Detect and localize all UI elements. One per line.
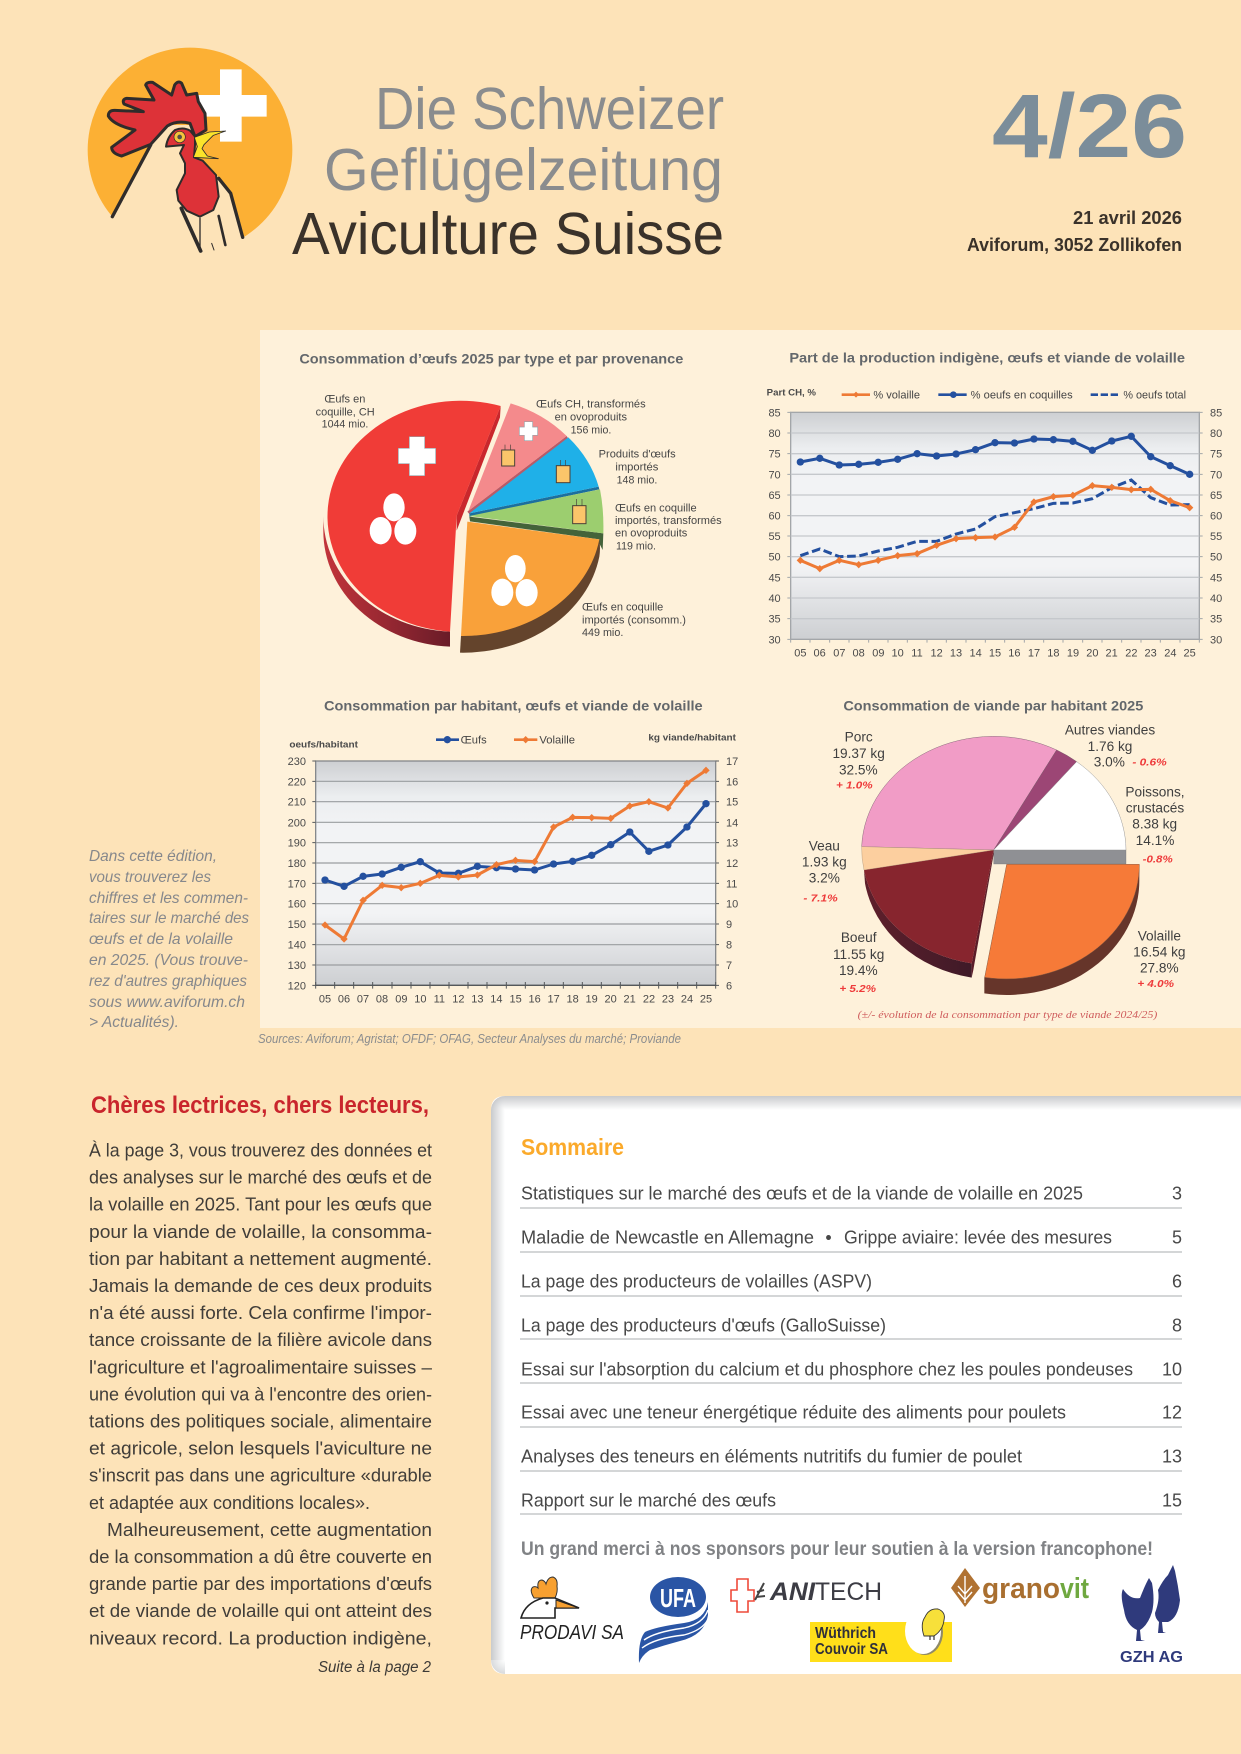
contents list: 5	[1172, 1228, 1182, 1248]
series: eggs	[325, 804, 706, 886]
contents list: Grippe aviaire: levée des mesures	[844, 1228, 1112, 1248]
contents list: Essai sur l'absorption du calcium et du phosphore chez les poules pondeuses	[521, 1360, 1133, 1380]
legend: kg viande/habitant	[648, 733, 736, 743]
slice: Swiss shell eggs	[323, 401, 501, 647]
right axis: 40	[1210, 593, 1222, 605]
label: Swiss shell eggs: Œufs en	[324, 393, 365, 405]
x axis: 10	[892, 648, 904, 660]
right axis: 15	[726, 797, 738, 809]
x axis: 22	[1125, 648, 1137, 660]
change: beef: + 5.2%	[839, 984, 876, 995]
legend: oeufs/habitant	[289, 739, 358, 749]
logo: Anitech	[731, 1578, 882, 1612]
x axis: 05	[794, 648, 806, 660]
side note: sous www.aviforum.ch	[89, 994, 245, 1011]
right axis: 80	[1210, 428, 1222, 440]
label: other meats: Autres viandes	[1065, 722, 1155, 737]
label: imported shell eggs: Œufs en coquille	[582, 602, 663, 614]
left axis: 75	[768, 449, 781, 461]
right axis: 11	[726, 878, 737, 890]
label: veal	[802, 838, 847, 886]
contents heading: Sommaire	[521, 1134, 624, 1160]
right axis: 14	[726, 817, 738, 829]
contents list: Statistiques sur le marché des œufs et de la viande de volaille en 2025	[521, 1184, 1083, 1204]
left axis: 120	[288, 980, 306, 992]
left axis	[768, 407, 781, 646]
label: pork: Porc	[845, 730, 873, 745]
left axis: 150	[288, 919, 306, 931]
x axis: 13	[950, 648, 962, 660]
left axis: 140	[288, 940, 306, 952]
series: poultry	[325, 770, 706, 939]
left axis: 160	[288, 899, 306, 911]
right axis: 7	[726, 960, 732, 972]
logo: UFA	[639, 1577, 708, 1663]
editorial body text: des analyses sur le marché des œufs et de	[89, 1167, 432, 1188]
right axis: 30	[1210, 634, 1222, 646]
logo: Granovit	[951, 1568, 1089, 1607]
x axis: 24	[681, 994, 693, 1006]
label: beef: Boeuf	[841, 930, 877, 945]
x axis: 25	[700, 994, 712, 1006]
x axis: 23	[1145, 648, 1157, 660]
label: pork	[832, 730, 885, 777]
logo: Anitech: ANI	[769, 1578, 816, 1606]
left axis: 60	[768, 511, 781, 523]
contents list: La page des producteurs d'œufs (GalloSuisse)	[521, 1316, 886, 1336]
left axis: 130	[288, 960, 306, 972]
label: imported processed: Œufs en coquille	[615, 502, 697, 514]
contents list: Analyses des teneurs en éléments nutritifs du fumier de poulet	[521, 1446, 1022, 1466]
editorial body text	[89, 1140, 433, 1648]
label: Swiss processed: Œufs CH, transformés	[536, 399, 646, 411]
x axis: 21	[624, 994, 636, 1006]
right axis: 35	[1210, 614, 1222, 626]
slice: imported processed shell eggs	[469, 489, 603, 550]
x axis: 06	[814, 648, 826, 660]
contents list: La page des producteurs de volailles (ASPV)	[521, 1272, 872, 1292]
contents rules	[520, 1208, 1182, 1514]
contents list: 15	[1162, 1490, 1182, 1510]
editorial body text: de la consommation a dû être couverte en	[89, 1546, 432, 1567]
slice: other meats	[994, 750, 1077, 850]
x axis: 15	[510, 994, 522, 1006]
location: Aviforum, 3052 Zollikofen	[967, 234, 1182, 255]
editorial body text: une évolution qui va à l'encontre des orien-	[89, 1383, 432, 1404]
left axis: 180	[288, 858, 306, 870]
chart: meat consumption pie	[802, 699, 1186, 1021]
legend: Part CH, %	[767, 388, 816, 398]
left axis: 200	[288, 817, 306, 829]
eye	[174, 131, 185, 143]
series: eggs total (dashed)	[800, 480, 1190, 557]
logo: Granovit: vit	[1060, 1573, 1089, 1605]
label: Swiss shell eggs: coquille, CH	[316, 407, 375, 419]
sponsors heading: Un grand merci à nos sponsors pour leur soutien à la version francophone!	[521, 1539, 1153, 1560]
contents list: 12	[1162, 1402, 1182, 1422]
x axis: 14	[490, 994, 502, 1006]
label: Swiss processed: en ovoproduits	[555, 412, 627, 424]
label: veal: 3.2%	[809, 871, 840, 886]
contents list: 3	[1172, 1184, 1182, 1204]
editorial body text: s'inscrit pas dans une agriculture «durable	[89, 1465, 432, 1486]
x axis: 18	[567, 994, 579, 1006]
editorial body text: n'a été aussi forte. Cela confirme l'impor-	[89, 1302, 432, 1323]
label: imported shell eggs: 449 mio.	[582, 627, 623, 639]
face and wattle	[166, 128, 219, 217]
right axis: 65	[1210, 490, 1222, 502]
panel: contents box	[491, 1096, 1241, 1674]
right axis: 55	[1210, 531, 1222, 543]
side note: en 2025. (Vous trouve-	[89, 952, 248, 969]
beak	[193, 131, 226, 159]
x axis: 09	[872, 648, 884, 660]
label: fish: crustacés	[1126, 801, 1184, 816]
editorial body text: pour la viande de volaille, la consomma-	[89, 1221, 432, 1242]
left axis: 50	[768, 552, 781, 564]
x axis: 15	[989, 648, 1001, 660]
logo: UFA: UFA	[660, 1583, 696, 1613]
label: veal: 1.93 kg	[802, 855, 847, 870]
change: pork: + 1.0%	[836, 781, 873, 792]
slice: poultry	[984, 864, 1139, 995]
label: Swiss shell eggs	[316, 393, 375, 431]
right axis: 17	[726, 756, 738, 768]
contents list: Rapport sur le marché des œufs	[521, 1490, 776, 1510]
label: fish: Poissons,	[1125, 785, 1185, 800]
side note	[89, 848, 249, 1031]
label: poultry: 16.54 kg	[1133, 945, 1186, 960]
x axis: 05	[319, 994, 331, 1006]
logo: Anitech: TECH	[815, 1578, 882, 1606]
heading: Consommation de viande par habitant 2025	[843, 699, 1144, 714]
series: poultry	[800, 486, 1190, 569]
chart: egg consumption pie	[299, 351, 722, 653]
left axis	[288, 756, 306, 992]
x axis: 10	[414, 994, 426, 1006]
x axis: 08	[376, 994, 388, 1006]
right axis: 75	[1210, 449, 1222, 461]
right axis: 16	[726, 776, 738, 788]
x axis: 20	[1086, 648, 1098, 660]
side note: chiffres et les commen-	[89, 890, 248, 907]
issue number: 4/26	[992, 77, 1187, 177]
x axis: 19	[586, 994, 598, 1006]
plot area	[791, 412, 1199, 639]
right axis: 70	[1210, 469, 1222, 481]
slice: imported shell eggs	[460, 522, 600, 653]
continuation note: Suite à la page 2	[318, 1659, 431, 1676]
x axis: 16	[1008, 648, 1020, 660]
contents list: Essai avec une teneur énergétique réduite des aliments pour poulets	[521, 1402, 1066, 1422]
label: Swiss processed	[536, 399, 646, 437]
editorial body text: grande partie par des importations d'œufs	[89, 1573, 432, 1594]
right axis: 9	[726, 919, 732, 931]
editorial body text: tion par habitant a nettement augmenté.	[89, 1248, 432, 1269]
panel: charts background	[260, 330, 1241, 1028]
contents list: •	[825, 1228, 832, 1248]
x axis: 16	[529, 994, 541, 1006]
x axis: 22	[643, 994, 655, 1006]
change: veal: - 7.1%	[803, 893, 838, 904]
x axis: 07	[357, 994, 369, 1006]
editorial body text: et agricole, selon lesquels l'aviculture ne	[89, 1438, 432, 1459]
heading: Consommation par habitant, œufs et viande de volaille	[324, 699, 703, 714]
left axis: 30	[768, 634, 781, 646]
icon: Swiss cross	[398, 437, 436, 476]
x axis: 06	[338, 994, 350, 1006]
x axis: 11	[434, 994, 445, 1006]
label: imported shell eggs	[582, 602, 686, 639]
x axis	[794, 648, 1196, 660]
editorial body text: niveaux record. La production indigène,	[89, 1627, 432, 1648]
chart: share of domestic production	[767, 351, 1222, 660]
icon: small Swiss cross	[519, 422, 538, 441]
neck outlines	[112, 145, 243, 251]
contents list: Maladie de Newcastle en Allemagne	[521, 1228, 814, 1248]
x axis: 14	[970, 648, 982, 660]
logo: Granovit: grano	[982, 1573, 1060, 1605]
slice: fish inner wall	[994, 850, 1126, 864]
x axis: 17	[1028, 648, 1040, 660]
x axis: 23	[662, 994, 674, 1006]
comb	[108, 82, 206, 156]
left axis: 70	[768, 469, 781, 481]
label: beef	[833, 930, 884, 978]
contents list	[521, 1184, 1182, 1510]
label: pork: 19.37 kg	[832, 746, 885, 761]
x axis: 21	[1106, 648, 1118, 660]
editorial body text: la volaille en 2025. Tant pour les œufs que	[89, 1194, 432, 1215]
x axis	[319, 994, 712, 1006]
left axis: 45	[768, 572, 781, 584]
side note: rez d'autres graphiques	[89, 973, 247, 990]
editorial body text: tance croissante de la filière avicole dans	[89, 1329, 432, 1350]
editorial body text: et de viande de volaille qui ont atteint des	[89, 1600, 432, 1621]
editorial body text: À la page 3, vous trouverez des données et	[89, 1140, 433, 1160]
cross	[197, 69, 267, 142]
label: poultry: Volaille	[1138, 928, 1181, 943]
left axis: 35	[768, 614, 781, 626]
x axis: 20	[605, 994, 617, 1006]
contents list: 13	[1162, 1446, 1182, 1466]
label: poultry	[1133, 928, 1186, 976]
right axis: 13	[726, 838, 738, 850]
editorial body text: Jamais la demande de ces deux produits	[89, 1275, 432, 1296]
side note: taires sur le marché des	[89, 910, 249, 927]
icon: eggs on orange	[491, 555, 538, 606]
label: imported products: 148 mio.	[617, 474, 657, 486]
side note: Dans cette édition,	[89, 848, 217, 865]
right axis: 6	[726, 980, 732, 992]
x axis: 19	[1067, 648, 1079, 660]
logo: Wüthrich Couvoir: Wüthrich	[815, 1625, 876, 1642]
label: imported products	[599, 449, 676, 486]
right axis	[726, 756, 738, 992]
editorial body text: tations des politiques sociale, alimentaire	[89, 1410, 432, 1432]
right axis: 60	[1210, 511, 1222, 523]
sources: Sources: Aviforum; Agristat; OFDF; OFAG, Secteur Analyses du marché; Proviande	[258, 1032, 681, 1046]
label: imported processed: importés, transformés	[615, 515, 722, 527]
left axis: 230	[288, 756, 306, 768]
series: shell eggs	[800, 436, 1190, 474]
change: other meats: - 0.6%	[1132, 757, 1167, 768]
rooster body	[93, 125, 244, 263]
label: poultry: 27.8%	[1140, 961, 1179, 976]
contents list: 6	[1172, 1272, 1182, 1292]
plot area	[316, 761, 716, 985]
right axis: 85	[1210, 407, 1222, 419]
change: poultry: + 4.0%	[1137, 979, 1174, 990]
heading: Consommation d’œufs 2025 par type et par provenance	[299, 351, 684, 366]
label: imported shell eggs: importés (consomm.)	[582, 615, 686, 627]
label: beef: 11.55 kg	[833, 947, 884, 962]
title: Geflügelzeitung: Geflügelzeitung	[324, 137, 723, 203]
right axis: 50	[1210, 552, 1222, 564]
label: beef: 19.4%	[839, 963, 878, 978]
x axis: 11	[911, 648, 923, 660]
logo: Wüthrich Couvoir: Couvoir SA	[815, 1641, 888, 1658]
x axis: 12	[931, 648, 943, 660]
editorial body text: Malheureusement, cette augmentation	[107, 1519, 432, 1540]
label: imported processed: en ovoproduits	[615, 528, 687, 540]
slice: Swiss processed eggs	[467, 403, 568, 514]
contents list: 8	[1172, 1316, 1182, 1336]
left axis: 65	[768, 490, 781, 502]
label: pork: 32.5%	[839, 762, 878, 777]
right axis: 12	[726, 858, 738, 870]
logo: Wüthrich Couvoir	[810, 1608, 952, 1662]
side note: vous trouverez les	[89, 869, 211, 886]
left axis: 85	[768, 407, 781, 419]
x axis: 13	[471, 994, 483, 1006]
slice: pork	[862, 736, 1057, 850]
legend: % oeufs total	[1123, 389, 1186, 401]
label: fish: 8.38 kg	[1132, 817, 1177, 832]
label: Swiss shell eggs: 1044 mio.	[322, 419, 368, 431]
legend	[767, 388, 1186, 401]
left axis: 210	[288, 797, 306, 809]
editorial body text: et adaptée aux conditions locales».	[89, 1492, 370, 1513]
left axis: 170	[288, 878, 306, 890]
right axis	[1210, 407, 1222, 646]
title: Aviculture Suisse: Aviculture Suisse	[292, 201, 724, 267]
left axis: 55	[768, 531, 781, 543]
contents list: 10	[1162, 1360, 1182, 1380]
legend: % oeufs en coquilles	[971, 389, 1073, 401]
left axis: 40	[768, 593, 781, 605]
change: fish: -0.8%	[1143, 855, 1173, 866]
slice: veal	[862, 847, 994, 870]
slice: beef	[864, 850, 994, 978]
title: Die Schweizer: Die Schweizer	[375, 76, 724, 142]
right axis: 45	[1210, 572, 1222, 584]
label: imported products: importés	[615, 461, 658, 473]
left axis: 220	[288, 776, 306, 788]
label: imported products: Produits d'œufs	[599, 449, 676, 461]
chart: consumption per capita	[288, 699, 738, 1006]
label: fish: 14.1%	[1136, 833, 1174, 848]
x axis: 25	[1184, 648, 1196, 660]
editorial body text: l'agriculture et l'agroalimentaire suisses –	[89, 1356, 433, 1377]
label: imported processed: 119 mio.	[616, 540, 656, 552]
label: imported processed	[615, 502, 722, 552]
icon: canister 2	[556, 460, 570, 483]
x axis: 17	[548, 994, 560, 1006]
x axis: 07	[833, 648, 845, 660]
icon: eggs on red	[370, 493, 416, 545]
side note: œufs et de la volaille	[89, 931, 233, 948]
logo: Prodavi: PRODAVI SA	[520, 1622, 624, 1644]
x axis: 09	[395, 994, 407, 1006]
heading: Part de la production indigène, œufs et viande de volaille	[789, 351, 1185, 366]
left axis: 80	[768, 428, 781, 440]
logo: rooster with Swiss cross	[88, 48, 292, 263]
x axis: 24	[1164, 648, 1176, 660]
logo: Prodavi	[520, 1577, 624, 1644]
date: 21 avril 2026	[1073, 207, 1182, 228]
slice: imported egg products	[469, 437, 599, 517]
label: other meats	[1065, 722, 1155, 770]
legend: Œufs	[461, 735, 487, 747]
left axis: 190	[288, 838, 306, 850]
right axis: 10	[726, 899, 738, 911]
logo: GZH	[1120, 1565, 1183, 1666]
slice: fish	[994, 762, 1126, 850]
legend	[289, 733, 736, 749]
icon: canister 1	[502, 445, 515, 466]
x axis: 18	[1047, 648, 1059, 660]
legend: % volaille	[873, 389, 920, 401]
x axis: 12	[452, 994, 464, 1006]
label: fish	[1125, 785, 1185, 848]
label: veal: Veau	[809, 838, 840, 853]
editorial heading: Chères lectrices, chers lecteurs,	[91, 1092, 429, 1119]
footnote: (±/- évolution de la consommation par type de viande 2024/25)	[858, 1010, 1158, 1021]
x axis: 08	[853, 648, 865, 660]
right axis: 8	[726, 940, 732, 952]
label: other meats: 1.76 kg	[1088, 739, 1132, 754]
logo: GZH: GZH AG	[1120, 1649, 1183, 1666]
legend: Volaille	[539, 735, 575, 747]
icon: canister 3	[573, 499, 586, 524]
label: Swiss processed: 156 mio.	[571, 425, 611, 437]
label: other meats: 3.0%	[1094, 755, 1125, 770]
side note: > Actualités).	[89, 1014, 179, 1031]
